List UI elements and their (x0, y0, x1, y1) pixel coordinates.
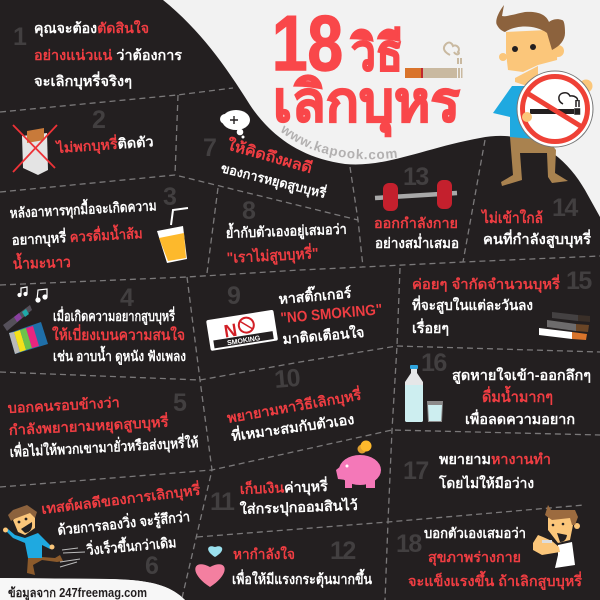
step 5: บอกคนรอบข้างว่า (7, 394, 120, 416)
step 17 (403, 451, 551, 491)
step 3 (9, 183, 188, 273)
icon: no smoking sticker: N (222, 320, 238, 342)
step 10: ที่เหมาะสมกับตัวเอง (230, 409, 355, 444)
step 2: ไม่พกบุหรี่ติดตัว (54, 131, 154, 157)
step 16: ดื่มน้ำมากๆ (482, 385, 553, 406)
step 16: 16 (421, 349, 446, 377)
step 13: อย่างสม่ำเสมอ (375, 233, 459, 251)
step 1: อย่างแน่วแน่ ว่าต้องการ (34, 47, 182, 63)
step 17: พยายามหางานทำ (439, 451, 551, 467)
step 15: เรื่อยๆ (412, 318, 449, 336)
step 2 (13, 106, 154, 175)
step 2: 2 (92, 106, 105, 134)
step 12: 12 (330, 537, 355, 565)
step 10: พยายามหาวิธีเลิกบุหรี่ (225, 385, 363, 427)
step 18 (396, 505, 582, 590)
step 13: ออกกำลังกาย (374, 215, 458, 231)
step 5: 5 (173, 389, 187, 417)
step 16: เพื่อลดความอยาก (465, 409, 575, 427)
step 5 (7, 389, 199, 461)
icon: shrinking cigarettes (539, 312, 590, 340)
step 4: เช่น อาบน้ำ ดูหนัง ฟังเพลง (53, 345, 186, 365)
step 18: 18 (396, 530, 422, 558)
step 4: 4 (120, 284, 134, 312)
step 6: วิ่งเร็วขึ้นกว่าเดิม (85, 531, 177, 558)
title (272, 0, 460, 137)
step 3: หลังอาหารทุกมื้อจะเกิดความ (9, 194, 157, 222)
step 5: กำลังพยายามหยุดสูบบุหรี่ (8, 412, 169, 439)
step 13: 13 (403, 163, 428, 191)
step 6: ด้วยการลองวิ่ง จะรู้สึกว่า (56, 506, 191, 539)
step 1 (13, 19, 182, 90)
step 4: ให้เบี่ยงเบนความสนใจ (52, 324, 185, 344)
step 18: บอกตัวเองเสมอว่า (424, 525, 526, 541)
icon: burning cigarette (405, 43, 462, 78)
step 15: ค่อยๆ จำกัดจำนวนบุหรี่ (412, 274, 560, 293)
step 3: อยากบุหรี่ ควรดื่มน้ำส้ม (11, 222, 143, 249)
step 9: มาติดเตือนใจ (282, 323, 365, 347)
step 7: 7 (203, 134, 216, 162)
step 14 (480, 194, 592, 248)
step 10 (225, 364, 363, 444)
step 18: สุขภาพร่างกาย (428, 549, 521, 566)
step 6: 6 (145, 552, 158, 580)
step 3: น้ำมะนาว (12, 250, 71, 273)
step 9: "NO SMOKING" (280, 301, 383, 327)
step 5: เพื่อไม่ให้พวกเขามายั่วหรือส่งบุหรี่ให้ (9, 432, 199, 461)
step 3: 3 (163, 183, 176, 211)
step 16 (405, 349, 591, 427)
step 16: สูดหายใจเข้า-ออกลึกๆ (452, 366, 591, 384)
step 6 (3, 480, 202, 580)
step 4 (3, 284, 186, 365)
website label: www.kapook.com (281, 126, 397, 160)
title: วิธี (350, 25, 403, 81)
icon: juice glass (157, 208, 188, 263)
icon: no smoking sticker: SMOKING (227, 335, 261, 347)
step 11: 11 (210, 488, 235, 516)
step 9: 9 (227, 282, 240, 310)
step 12: หากำลังใจ (233, 545, 295, 562)
icon: film clapper (3, 305, 48, 354)
step 11 (210, 440, 381, 518)
step 8 (225, 197, 347, 268)
step 13 (374, 163, 459, 251)
step 18: จะแข็งแรงขึ้น ถ้าเลิกสูบบุหรี่ (408, 570, 582, 590)
icon: running man (3, 505, 85, 575)
icon: flexing man (533, 505, 580, 568)
step 1: คุณจะต้องตัดสินใจ (34, 19, 149, 37)
step 8: 8 (242, 197, 256, 225)
icon: crossed cigarette pack (13, 125, 57, 175)
title: เลิกบุหร (273, 70, 460, 137)
icon: piggy bank (336, 440, 381, 488)
step 7: ให้คิดถึงผลดี (225, 136, 314, 177)
step 9: หาสติ๊กเกอร์ (278, 282, 352, 307)
step 11: ใส่กระปุกออมสินไว้ (240, 496, 358, 518)
icon: hearts (195, 546, 225, 587)
source credit panel (0, 578, 185, 600)
icon: music notes (18, 287, 47, 302)
step 6: เทสต์ผลดีของการเลิกบุหรี่ (40, 480, 202, 518)
step 1: จะเลิกบุหรี่จริงๆ (34, 71, 132, 90)
step 4: เมื่อเกิดความอยากสูบบุหรี่ (53, 306, 175, 325)
step 7 (203, 110, 328, 202)
icon: barbell (375, 180, 457, 211)
step 12 (195, 537, 372, 588)
source credit panel: ข้อมูลจาก 247freemag.com (8, 586, 147, 600)
icon: water glass (427, 401, 443, 422)
step 17: 17 (403, 457, 428, 485)
step 12: เพื่อให้มีแรงกระตุ้นมากขึ้น (232, 568, 372, 588)
step 14: 14 (552, 194, 578, 222)
step 8: "เราไม่สูบบุหรี่" (226, 242, 319, 268)
step 14: คนที่กำลังสูบบุหรี่ (483, 229, 592, 248)
title: 18 (272, 0, 343, 87)
step 1: 1 (13, 23, 27, 51)
step 7: ของการหยุดสูบบุหรี่ (219, 158, 328, 202)
step 8: ย้ำกับตัวเองอยู่เสมอว่า (225, 218, 347, 242)
icon: no smoking sticker (206, 310, 278, 351)
icon: water bottle (405, 365, 423, 422)
character: man holding no smoking sign (493, 5, 593, 186)
step 14: ไม่เข้าใกล้ (480, 208, 543, 227)
step 15: ที่จะสูบในแต่ละวันลง (412, 295, 533, 314)
step 10: 10 (273, 364, 301, 394)
step 15 (412, 267, 592, 340)
icon: thought cloud (220, 110, 250, 138)
step 15: 15 (566, 267, 592, 295)
step 17: โดยไม่ให้มือว่าง (438, 474, 534, 491)
step 11: เก็บเงินค่าบุหรี่ (239, 476, 329, 498)
step 9 (206, 282, 383, 351)
